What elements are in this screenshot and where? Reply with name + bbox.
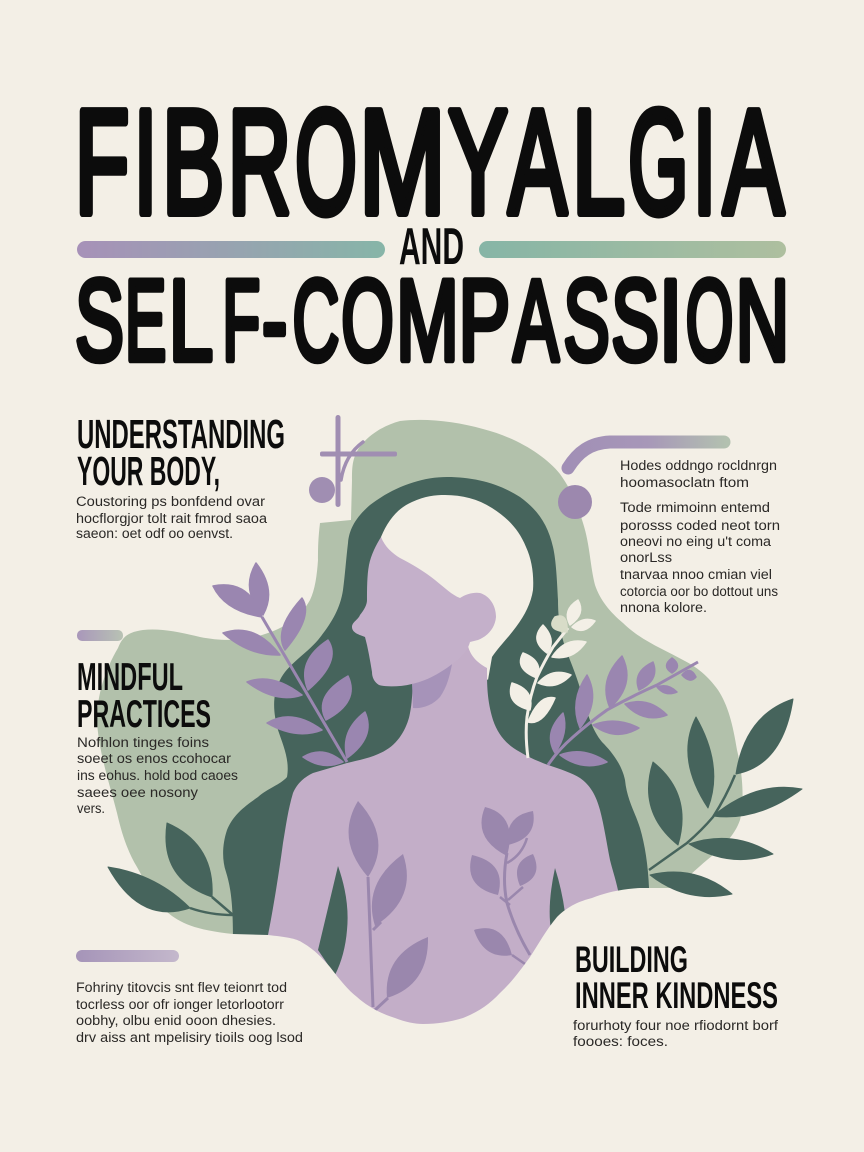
title: C [292,256,339,385]
section: right text block: tnarvaa nnoo cmian viel [620,567,772,582]
face profile [352,537,496,686]
central illustration [0,420,864,1152]
title: O [686,256,733,385]
section: lower left text [76,950,303,1045]
sage background blob [97,420,743,934]
title: AND [399,218,464,276]
title: S [75,256,124,385]
section: understanding your body: YOUR BODY, [77,448,220,494]
section: mindful practices: Nofhlon tinges foins [77,735,209,750]
title: G [628,80,688,245]
title: I [134,80,157,245]
section: right text block: porosss coded neot torn [620,518,780,533]
cream head opening [381,495,533,680]
section: building inner kindness: BUILDING [575,939,688,980]
title: A [513,256,559,385]
dark left sprig [108,823,233,915]
title: F [75,80,129,245]
section: mindful practices: MINDFUL [77,656,183,699]
chest sprig left [349,801,428,1010]
title: A [723,80,784,245]
figure body [262,640,640,1040]
section: lower left text: oobhy, olbu enid ooon dhesies. [76,1013,276,1028]
section: lower left text: Fohriny titovcis snt flev teionrt tod [76,980,287,995]
dark right sprig [649,699,802,897]
decorative arc and dot [558,442,724,519]
section: lower left text: tocrless oor ofr ionger letorlootorr [76,997,285,1012]
title: I [693,80,716,245]
dark hair [223,477,660,940]
cream lower wave [0,888,864,1152]
section: right text block: Hodes oddngo rocldnrgn [620,458,777,473]
title: R [228,80,291,245]
section: building inner kindness: foooes: foces. [573,1034,668,1049]
section: mindful practices: soeet os enos ccohocar [77,751,232,766]
title: M [359,80,446,245]
title: L [169,256,213,385]
title: M [396,256,459,385]
dark torso leaf left [318,866,348,975]
title: S [563,256,610,385]
decorative cross and branch [309,415,397,507]
white sprig [510,600,595,758]
title: N [736,256,789,385]
title: E [125,256,166,385]
section: mindful practices: saees oee nosony [77,785,198,800]
chest sprig right [470,807,536,964]
section: understanding your body [76,411,285,541]
section: understanding your body: saeon: oet odf oo oenvst. [76,526,233,541]
section: understanding your body: Coustoring ps bonfdend ovar [76,494,266,509]
section: right text block: onorLss [620,550,672,565]
title: B [162,80,224,245]
title [75,80,789,385]
left purple sprig [213,563,368,766]
section: right text block: Tode rmimoinn entemd [620,500,770,515]
title: A [508,80,567,245]
section: building inner kindness: forurhoty four noe rfiodornt borf [573,1018,778,1033]
section: building inner kindness [573,939,778,1049]
title: L [572,80,625,245]
section: understanding your body: UNDERSTANDING [77,411,285,457]
title: O [341,256,394,385]
title: O [295,80,357,245]
section: mindful practices: PRACTICES [77,693,211,736]
title: I [659,256,682,385]
title: - [262,256,287,385]
title: F [222,256,260,385]
right purple sprig [548,656,698,766]
section: right text block [620,458,780,615]
section: understanding your body: hocflorgjor tolt rait fmrod saoa [76,511,268,526]
section: mindful practices: ins eohus. hold bod caoes [77,768,238,783]
section: right text block: nnona kolore. [620,600,707,615]
section: right text block: cotorcia oor bo dottout uns [620,584,778,599]
title: S [611,256,659,385]
title: P [458,256,510,385]
neck shadow [412,664,452,708]
dark torso leaf right [550,868,565,930]
section: lower left text: drv aiss ant mpelisiry tioils oog lsod [76,1030,303,1045]
section: right text block: oneovi no eing u't coma [620,534,772,549]
section: mindful practices: vers. [77,801,105,816]
title: Y [448,80,508,245]
section: mindful practices [77,630,238,816]
section: right text block: hoomasoclatn ftom [620,475,749,490]
